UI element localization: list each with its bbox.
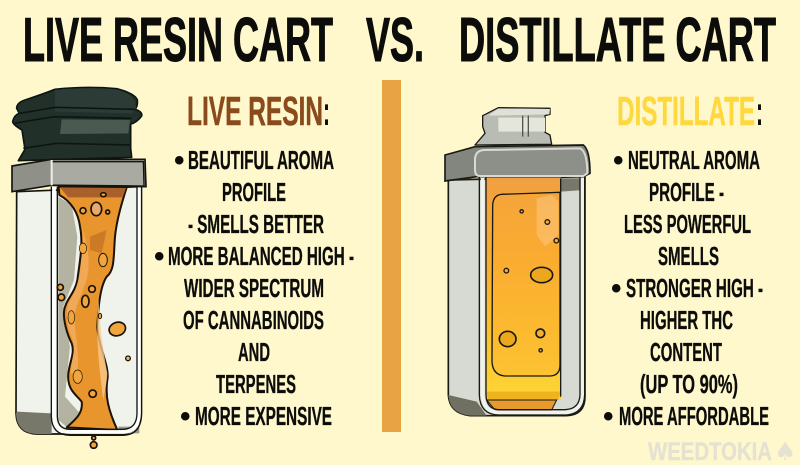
title: LIVE RESIN CART — [23, 6, 333, 75]
oil fill — [486, 177, 561, 400]
text block: distillate bullets: (UP TO 90%) — [640, 369, 738, 399]
text block: distillate bullets: HIGHER THC — [640, 305, 733, 335]
inner sleeve outline — [483, 177, 582, 412]
heading: live resin: LIVE RESIN — [187, 88, 323, 134]
text block: live resin bullets: • — [154, 240, 165, 273]
text block: live resin bullets: MORE BALANCED HIGH - — [168, 241, 354, 271]
text block: live resin bullets — [154, 144, 354, 433]
text block: live resin bullets: WIDER SPECTRUM — [184, 273, 324, 303]
text block: live resin bullets: - SMELLS BETTER — [188, 209, 324, 239]
text block: distillate bullets — [603, 144, 769, 433]
text block: live resin bullets: MORE EXPENSIVE — [195, 401, 332, 431]
icon: distillate cartridge — [445, 108, 590, 416]
text block: distillate bullets: SMELLS — [658, 241, 719, 271]
text block: live resin bullets: • — [174, 144, 185, 177]
text block: live resin bullets: BEAUTIFUL AROMA — [188, 145, 334, 175]
text block: live resin bullets: OF CANNABINOIDS — [183, 305, 324, 335]
text block: distillate bullets: PROFILE - — [649, 177, 724, 207]
inner sleeve outline — [54, 187, 139, 432]
text block: live resin bullets: • — [180, 400, 191, 433]
icon: live resin cartridge — [12, 87, 146, 448]
center divider — [382, 80, 401, 432]
text block: distillate bullets: • — [611, 272, 622, 305]
collar — [12, 159, 146, 192]
title: VS. — [366, 6, 424, 75]
heading: live resin — [187, 88, 330, 134]
collar — [445, 145, 590, 181]
heading: distillate: : — [756, 88, 763, 134]
text block: live resin bullets: TERPENES — [216, 369, 296, 399]
heading: live resin: : — [323, 88, 330, 134]
resin stream — [59, 187, 127, 430]
text block: distillate bullets: CONTENT — [650, 337, 722, 367]
text block: live resin bullets: AND — [238, 337, 270, 367]
text block: live resin bullets: PROFILE — [222, 177, 286, 207]
text block: distillate bullets: • — [613, 144, 624, 177]
text block: distillate bullets: • — [603, 400, 614, 433]
